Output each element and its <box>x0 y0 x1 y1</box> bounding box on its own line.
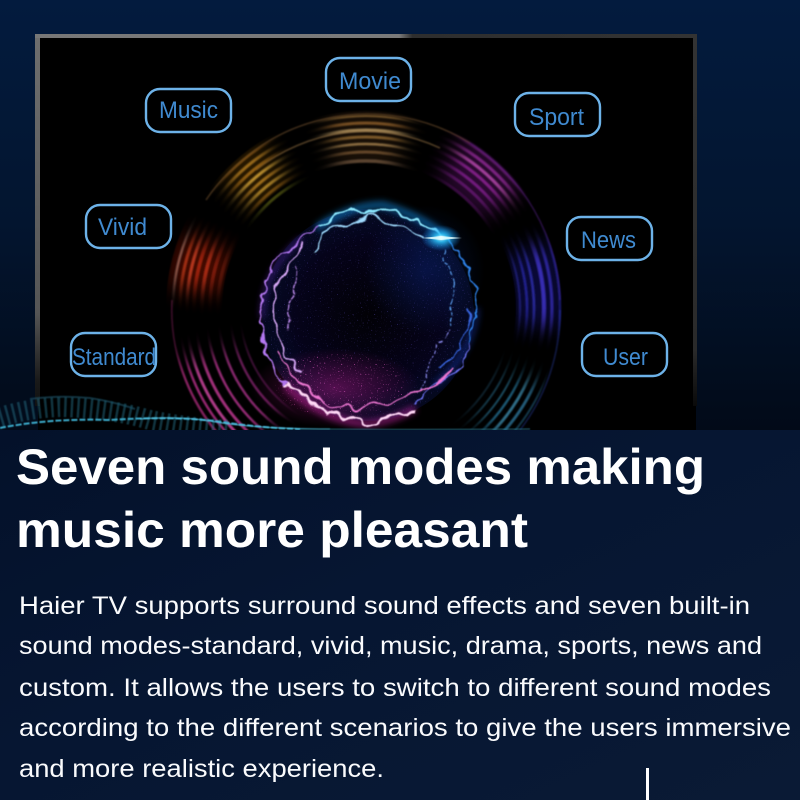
sphere bright strands <box>260 206 477 425</box>
particle wave <box>0 397 530 430</box>
orange top arc <box>313 111 419 168</box>
body text: according to the different scenarios to give the users immersive <box>19 714 791 742</box>
heading <box>16 439 705 558</box>
purple upper-right arc <box>430 134 526 226</box>
body text <box>19 592 791 783</box>
mode button: User: User <box>603 344 648 371</box>
cursor line <box>646 768 649 800</box>
body text: sound modes-standard, vivid, music, drama, sports, news and <box>19 632 762 660</box>
mode button: Standard: Standard <box>72 344 156 371</box>
mode button: Vivid <box>86 205 171 248</box>
sphere inner strands <box>270 216 470 408</box>
heading: music more pleasant <box>16 502 528 558</box>
lower text panel <box>0 430 800 800</box>
mode button: User <box>582 333 667 376</box>
mode button: Standard <box>71 333 156 376</box>
teal lower-right arc <box>462 360 547 430</box>
sphere glow strands <box>262 205 477 424</box>
mode button: Movie <box>326 58 411 101</box>
red left arc <box>167 222 235 308</box>
mode button: News: News <box>581 227 636 254</box>
sound rings <box>167 111 562 430</box>
mode button: Music: Music <box>159 97 218 124</box>
sphere flare <box>421 225 461 251</box>
mode button: Vivid: Vivid <box>98 214 147 241</box>
mode button: Music <box>146 89 231 132</box>
sphere speckle <box>264 211 472 419</box>
heading: Seven sound modes making <box>16 439 705 495</box>
blue right arc <box>505 230 562 344</box>
mode button: News <box>567 217 652 260</box>
mode button: Movie: Movie <box>339 68 401 95</box>
body text: custom. It allows the users to switch to different sound modes <box>19 674 771 702</box>
body text: and more realistic experience. <box>19 755 384 783</box>
mode button: Sport <box>515 93 600 136</box>
faint full ring lines <box>172 114 560 450</box>
sound sphere <box>250 205 485 428</box>
TV screen <box>35 34 697 430</box>
body text: Haier TV supports surround sound effects and seven built-in <box>19 592 750 620</box>
amber upper-left arc <box>215 138 300 221</box>
mode button: Sport: Sport <box>529 104 584 131</box>
magenta lower-left arc <box>176 332 292 430</box>
